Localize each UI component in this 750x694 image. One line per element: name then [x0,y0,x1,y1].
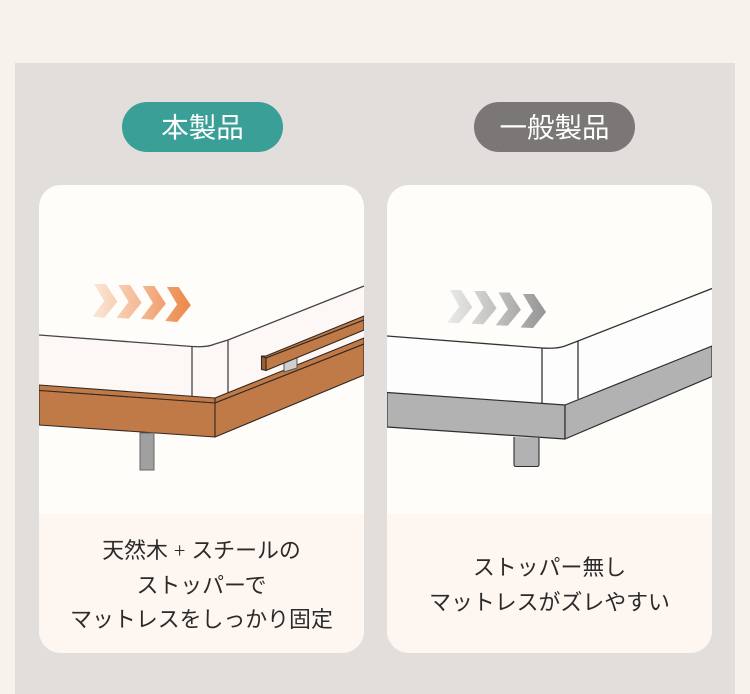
icon: motion arrows gray [447,290,546,328]
caption text [429,555,670,614]
mattress outlines [39,286,364,396]
icon: motion arrows orange [92,284,191,322]
mattress outlines [387,288,712,403]
caption text: ストッパー無し [473,555,626,580]
wood stopper bar [262,316,364,370]
caption box [387,514,712,653]
panel: this product card [39,185,364,653]
caption text [70,535,333,632]
heading pill: this product: 本製品 [161,112,244,143]
mattress side faces [39,286,364,398]
illustration: bed corner without stopper [387,288,712,467]
caption text: 天然木 + スチールの [102,535,301,565]
illustration: bed corner with wood and steel stopper [39,284,364,470]
caption text: マットレスをしっかり固定 [70,607,333,632]
panel: generic product card [387,185,712,653]
caption box [39,514,364,653]
heading pill: generic product [474,102,635,152]
heading pill: this product [122,102,283,152]
steel leg [140,433,154,470]
wood frame [39,338,364,437]
mattress side faces [387,288,712,405]
steel stopper bracket [284,357,297,372]
gray frame [387,346,712,439]
caption text: マットレスがズレやすい [429,590,670,614]
caption text: ストッパーで [136,572,267,598]
gray leg [514,437,539,466]
heading pill: generic product: 一般製品 [500,112,610,143]
